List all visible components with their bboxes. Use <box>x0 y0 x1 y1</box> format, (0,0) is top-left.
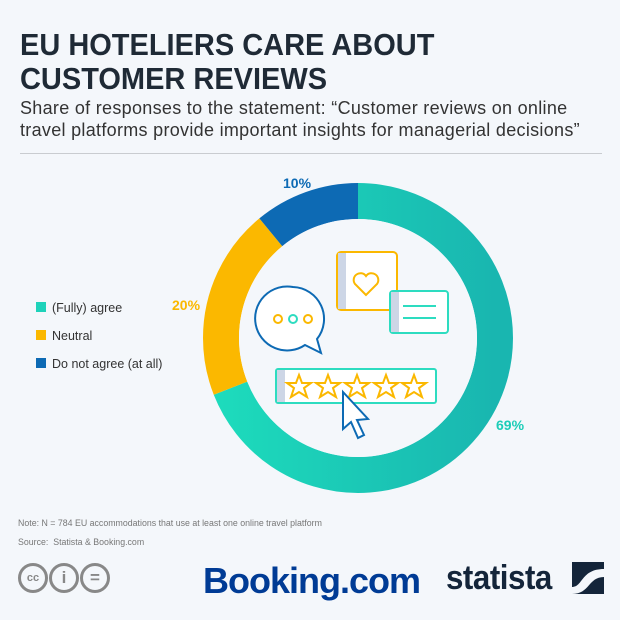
icon: cursor <box>343 392 368 438</box>
legend <box>36 301 162 371</box>
title <box>20 27 434 96</box>
title: EU HOTELIERS CARE ABOUT <box>20 27 434 62</box>
source: Source: Statista & Booking.com <box>18 537 144 547</box>
logo: booking: Booking.com <box>203 560 420 601</box>
icon: heart card <box>337 252 397 310</box>
icon: cc licence <box>18 563 110 593</box>
legend: Neutral <box>52 329 92 343</box>
subtitle <box>20 98 580 140</box>
icon: star rating bar <box>276 369 436 403</box>
icon: cc licence: i <box>62 568 66 587</box>
icon: text card <box>390 291 448 333</box>
icon: cc licence: = <box>90 568 100 587</box>
legend: (Fully) agree <box>52 301 122 315</box>
subtitle: Share of responses to the statement: “Customer reviews on online <box>20 98 567 118</box>
label: 69%: 69% <box>496 417 525 433</box>
icon: speech bubble <box>255 286 324 353</box>
note: Note: N = 784 EU accommodations that use at least one online travel platform <box>18 518 322 528</box>
legend: Do not agree (at all) <box>52 357 162 371</box>
logo: statista <box>446 559 604 597</box>
label: 10%: 10% <box>283 175 312 191</box>
subtitle: travel platforms provide important insights for managerial decisions” <box>20 120 580 140</box>
title: CUSTOMER REVIEWS <box>20 61 327 96</box>
icon: cc licence: cc <box>27 572 39 584</box>
logo: statista: statista <box>446 559 552 597</box>
label: 20%: 20% <box>172 297 201 313</box>
